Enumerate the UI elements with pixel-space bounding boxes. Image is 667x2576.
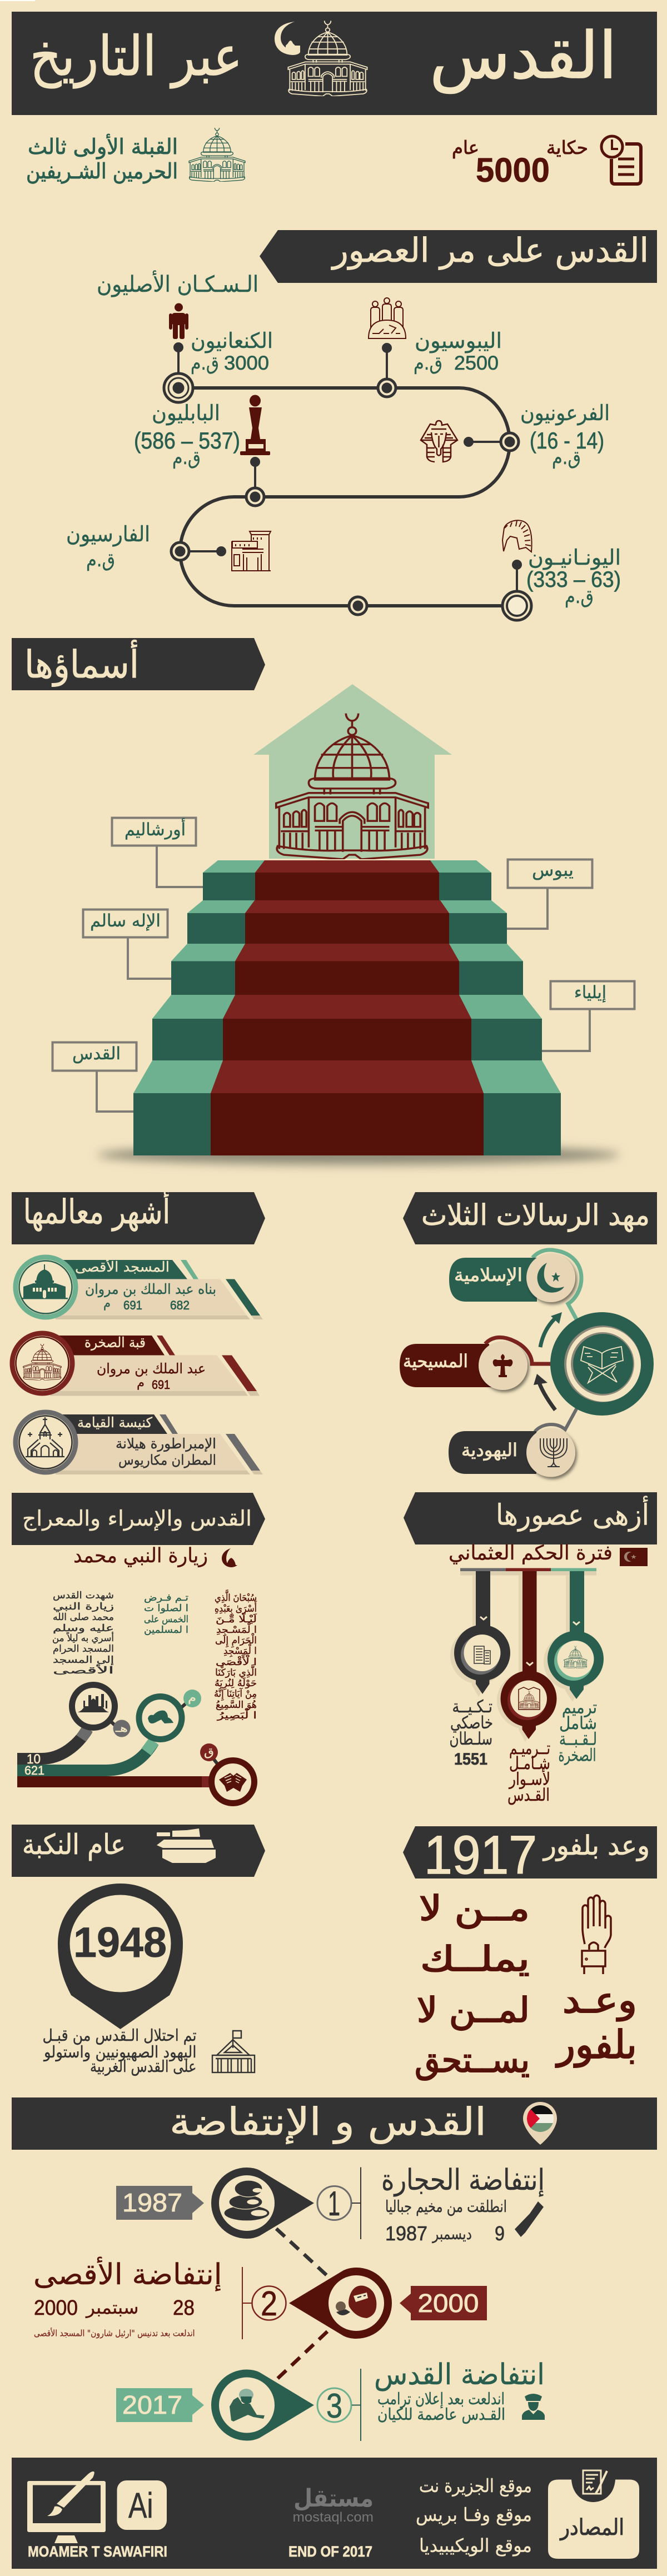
text: Canaanites: 3000 (224, 352, 269, 374)
icon: document with pen (583, 2470, 607, 2494)
text: prophet visit description: الأقصى (53, 1665, 114, 1676)
text: quran verse (214, 1590, 257, 1721)
text: Jebusites: 2500 (454, 352, 499, 374)
text: Babylonians: البابليون (152, 401, 220, 426)
text: hospice: تـكـيــة (452, 1697, 492, 1717)
panel: sources badge (548, 2470, 639, 2559)
text: Greeks: ق.م (565, 586, 594, 608)
panel: intifada timeline (33, 2164, 545, 2441)
heading: balfour 1917 (403, 1825, 657, 1885)
icon: illustrator badge (117, 2480, 167, 2530)
subheading: prophet visit: زيارة النبي محمد (73, 1544, 208, 1567)
icon: people on globe (369, 298, 406, 338)
icon: person (169, 303, 188, 339)
logo: mostaql (292, 2484, 374, 2525)
text: quran verse: هُوَ السَّمِيعُ (216, 1700, 257, 1711)
heading: cradle of three religions: مهد الرسالات الثلاث (421, 1199, 650, 1232)
heading: al-quds and intifada: القدس و الإنتفاضة (170, 2100, 486, 2144)
text: stones detail: انطلقت من مخيم جباليا (385, 2197, 507, 2216)
row: stones intifada (116, 2164, 545, 2245)
icon: crescent and star (537, 1263, 564, 1293)
icon ring (12, 1333, 72, 1393)
text: first qibla: القبلة الأولى ثالث (28, 133, 178, 160)
icon: babylonian statue (240, 395, 270, 455)
text: Canaanites: الكنعانيون (191, 328, 273, 353)
number badge (317, 2186, 351, 2220)
icon: tank (157, 1828, 216, 1863)
arrow: up dark (534, 1374, 555, 1410)
logo: mostaql: mostaql.com (292, 2510, 374, 2525)
text: prophet visit description: أسري به ليلاً من (52, 1632, 114, 1644)
year tag: 1987: 1987 (122, 2188, 182, 2217)
heading: its names: أسماؤها (24, 640, 139, 687)
text: occupation: اليهود الصهيونيين واستولو (43, 2042, 197, 2061)
icon: dome of the rock (288, 21, 367, 96)
text: prophet visit description: محمد صلى الله (53, 1612, 114, 1623)
icon: greek helmet (502, 520, 532, 552)
title ribbon (56, 1414, 167, 1434)
text: sources list: موقع وفـا بريس (416, 2504, 532, 2525)
heading: golden eras: أزهى عصورها (496, 1496, 649, 1532)
text: hospice: 1551 (454, 1750, 487, 1768)
text: sharon note: اندلعت بعد تدنيس "ارئيل شارون" المسجد الأقصى (34, 2328, 195, 2339)
row: aqsa intifada: 2 (261, 2285, 277, 2323)
row: jerusalem intifada: 3 (326, 2387, 342, 2425)
text: occupation: على القدس الغربية (90, 2057, 197, 2076)
text: dome restoration (558, 1697, 597, 1766)
text: quran verse: سُبْحَانَ الَّذِي (215, 1590, 257, 1604)
label: Aelia: إيلياء (574, 983, 606, 1003)
icon: pharaoh (421, 421, 457, 462)
panel: Al-Aqsa card (16, 1257, 263, 1319)
year tag: 2000 (400, 2286, 487, 2320)
timeline nodes (164, 373, 531, 620)
logo: mostaql: مستقل (293, 2484, 374, 2513)
pin: city walls (497, 1571, 557, 1742)
text: Pharaohs: الفرعونيون (520, 401, 610, 426)
pill: christianity (400, 1341, 527, 1390)
text: Jebusites: ق.م (414, 352, 442, 375)
text: aqsa title: إنتفاضة الأقصى (33, 2256, 222, 2291)
text: Jebusites (414, 328, 502, 375)
text: Babylonians: (586 – 537) (134, 427, 240, 454)
heading: balfour 1917: 1917 (424, 1825, 537, 1885)
text: built by: 682 (170, 1298, 190, 1312)
text: aqsa date (34, 2296, 195, 2320)
panel: timeline of peoples (66, 270, 621, 620)
icon: open quran (581, 1347, 623, 1383)
text: five prayers: ا لصلوا ت (144, 1603, 188, 1614)
icon: illustrator badge: Ai (128, 2485, 153, 2525)
text: walls restoration: تــرميـم (509, 1738, 550, 1758)
subheading: ottoman rule: فترة الحكم العثماني (449, 1542, 613, 1564)
text: prophet visit description: إلى المسجد (53, 1655, 114, 1666)
panel: stairs with names (52, 684, 635, 1165)
text: built by: 691 (123, 1298, 142, 1312)
icon: gaza strip (515, 2201, 544, 2237)
label: Yabus (507, 859, 593, 929)
icon: stone thrower (230, 2389, 265, 2421)
dashed connectors (276, 2229, 327, 2380)
number: 1948: 1948 (73, 1919, 167, 1966)
icon: raised hand (582, 1895, 611, 1974)
panel: balfour declaration (415, 1888, 637, 2080)
text: slogan: يملــك (420, 1939, 530, 1979)
icon: prostrating figure (148, 1711, 173, 1723)
pin: dome restoration (544, 1571, 604, 1702)
text: hospice: سلـطان (449, 1729, 492, 1749)
icon: clock document (601, 136, 641, 184)
text: dome restoration: لـقـبــة (559, 1730, 597, 1750)
heading: its names (12, 638, 265, 690)
house backdrop (253, 684, 452, 859)
label: Urshalim (112, 818, 203, 887)
title ribbon: كنيسة القيامة (77, 1414, 152, 1431)
text: built by (85, 1281, 216, 1312)
text: occupation: تم احتلال الـقدس من قبـل (42, 2026, 197, 2045)
text: jerusalem detail: اندلعت بعد إعلان ترامب (377, 2389, 505, 2409)
text: quran verse: ا لْمَسْـجِدِ (216, 1622, 257, 1636)
text: hospice: خاصكي (450, 1713, 493, 1733)
text: dome restoration: ترميم (562, 1697, 597, 1717)
panel: Holy Sepulchre card (16, 1412, 263, 1474)
text: Persians: ق.م (86, 549, 115, 571)
title ribbon (53, 1334, 165, 1355)
icon: parliament (212, 2031, 255, 2072)
map pin (58, 1884, 183, 2029)
text: slogan: لمــن لا (417, 1990, 530, 2030)
color bar (460, 1568, 596, 1575)
icon ring (16, 1257, 76, 1317)
text: prophet visit description: عليه وسلم (53, 1623, 114, 1634)
text: Greeks (526, 545, 621, 608)
title: القدس: القدس (430, 18, 617, 93)
text: occupation (42, 2026, 197, 2076)
heading: al-quds and intifada (12, 2097, 657, 2150)
icon: crescent mosque (222, 1548, 237, 1567)
text: hospice (449, 1697, 493, 1768)
text: prophet visit description: المسجد الحرام (53, 1643, 114, 1655)
year tag: 2000: 2000 (418, 2289, 479, 2318)
icon ring (16, 1412, 76, 1472)
panel: footer (12, 2458, 657, 2569)
text: slogan: مــن لا (419, 1888, 530, 1929)
pill: islam (449, 1253, 575, 1302)
text: prophet visit description (52, 1590, 114, 1676)
text: stones detail: 9 (495, 2222, 505, 2245)
text: Babylonians (134, 401, 240, 469)
arrow: up green (540, 1312, 562, 1347)
icon: crescent with mosque (275, 22, 300, 55)
text: five prayers: الخمس على (144, 1614, 188, 1625)
heading: famous landmarks (12, 1190, 265, 1244)
label: Aelia (542, 981, 635, 1051)
marker: gregorian (139, 1690, 201, 1740)
text: jerusalem detail: القـدس عاصمة للكيان (377, 2405, 505, 2424)
heading: through the ages (260, 230, 657, 283)
connector: christianity line (485, 1337, 565, 1364)
shadow under stairs (97, 1145, 620, 1165)
chart: curved bands (17, 1728, 214, 1787)
pill: christianity: المسيحية (403, 1351, 468, 1372)
row: jerusalem intifada (116, 2358, 545, 2441)
text: Persians: الفارسيون (66, 522, 150, 547)
pill: judaism: اليهودية (461, 1439, 517, 1461)
heading: through the ages: القدس على مر العصور (331, 231, 649, 270)
heading: famous landmarks: أشهر معالمها (23, 1190, 170, 1232)
icon: turkish flag (620, 1548, 648, 1566)
heading: israa and miraj: القدس والإسراء والمعراج (22, 1506, 252, 1531)
text: story: حكاية (546, 137, 588, 158)
text: Abd al-Malik: عبد الملك بن مروان (97, 1361, 206, 1377)
icon: persian palace (232, 531, 271, 571)
label: Yabus: يبوس (532, 860, 574, 880)
text: Persians (66, 522, 150, 571)
label: Urshalim: أورشاليم (125, 818, 186, 840)
icon: dome (564, 1646, 587, 1668)
text: prophet visit description: شهدت القدس (53, 1590, 114, 1601)
text: walls restoration: شـامـل (509, 1753, 550, 1773)
connector: judaism line (535, 1398, 583, 1432)
heading: balfour 1917: وعد بلفور (542, 1830, 650, 1861)
text: Abd al-Malik (97, 1361, 206, 1392)
year tag: 2017 (116, 2388, 204, 2422)
text: sources list: موقع الويكيبيديا (419, 2534, 532, 2557)
number badge (252, 2286, 286, 2320)
panel: intro stats (26, 128, 641, 189)
year tag: 1987 (116, 2186, 204, 2220)
text: sources list (416, 2475, 532, 2557)
text: quran verse: الَّذِي بَارَكْنَا (215, 1664, 257, 1678)
text: Helena and Macarius (116, 1436, 216, 1468)
text: aqsa date: سبتمبر (85, 2297, 139, 2318)
label: Al-Quds (52, 1043, 137, 1112)
text: balfour promise: بلفور (555, 2022, 637, 2067)
text: end of 2017: END OF 2017 (288, 2543, 372, 2560)
panel: nakba 1948 (42, 1884, 255, 2076)
center circle with quran (550, 1312, 654, 1416)
icon: church (26, 1417, 64, 1457)
text: original inhabitants: الـسـكـان الأصليون (97, 270, 258, 297)
heading: nakba year (12, 1825, 265, 1877)
text: designer name: MOAMER T SAWAFIRI (28, 2543, 167, 2560)
marker: quran (200, 1743, 255, 1803)
text: dome restoration: الصخرة (558, 1746, 596, 1766)
heading: golden eras (404, 1492, 657, 1544)
text: Pharaohs: (16 - 14) (530, 427, 604, 454)
panel: ottoman era (449, 1542, 648, 1805)
text: balfour promise (555, 1980, 637, 2067)
text: Helena and Macarius: المطران مكاريوس (118, 1452, 216, 1468)
panel: sources badge: المصادر (559, 2515, 624, 2540)
icon: masked youth (336, 2285, 376, 2318)
year tag: 2017: 2017 (122, 2390, 182, 2419)
icon: dome (23, 1344, 61, 1381)
text: quran verse: مِنْ آيَاتِنَا إِنَّهُ (214, 1687, 257, 1701)
text: jerusalem detail (377, 2389, 505, 2424)
heading: cradle of three religions (403, 1192, 657, 1244)
chart: curved bands: 621 (24, 1763, 44, 1777)
label: Al-Quds: القدس (72, 1044, 121, 1064)
text: aqsa date: 28 (173, 2296, 195, 2320)
text: walls restoration: القـدس (507, 1785, 550, 1805)
text: Abd al-Malik: م (137, 1376, 145, 1390)
text: five prayers (144, 1592, 188, 1636)
text: Canaanites: ق.م (191, 352, 219, 375)
text: first qibla: الحرمين الشـريفين (26, 159, 178, 184)
text: first qibla (26, 133, 178, 184)
text: built by: م (103, 1297, 111, 1311)
text: quran verse: حَوْلَهُ لِنُرِيَهُ (215, 1677, 257, 1690)
icon: menorah (540, 1438, 567, 1467)
stairs (133, 860, 561, 1155)
text: stones detail: 1987 (385, 2222, 427, 2245)
row: stones intifada: 1 (328, 2185, 340, 2223)
timeline path (178, 388, 517, 606)
label: god Salem (83, 909, 171, 979)
text: aqsa date: 2000 (34, 2296, 78, 2320)
text: dome restoration: شامل (559, 1713, 597, 1733)
label: god Salem: الإله سالم (90, 911, 161, 931)
text: Pharaohs: ق.م (552, 447, 581, 469)
number: 5000: 5000 (476, 151, 550, 189)
icon: green dome (189, 128, 245, 182)
text: quran verse: أَسْرَىٰ بِعَبْدِهِ (215, 1601, 257, 1615)
icon: walls and dome (519, 1687, 540, 1710)
pill: judaism (449, 1428, 575, 1477)
marker: hijri: هـ (115, 1723, 128, 1735)
text: year: عام (452, 137, 479, 158)
text: Canaanites (191, 328, 273, 375)
text: jerusalem title: انتفاضة القدس (374, 2358, 545, 2391)
text: prophet visit description: زيارة النبي (53, 1601, 114, 1612)
text: stones detail: ديسمبر (431, 2225, 472, 2243)
pin: hospice (450, 1571, 510, 1697)
icon: monitor and brush (27, 2472, 106, 2543)
text: balfour promise: وعـد (563, 1980, 637, 2021)
marker: quran: ق (204, 1745, 214, 1758)
text: Greeks: (333 – 63) (526, 567, 621, 592)
text: five prayers: ا لمسلمين (144, 1625, 188, 1636)
red carpet (211, 860, 484, 1155)
pin stems (175, 343, 521, 592)
icon: dome of the rock (276, 714, 428, 859)
text: Babylonians: ق.م (172, 447, 201, 469)
icon: palestine flag pin (523, 2102, 557, 2145)
text: Jebusites: اليبوسيون (415, 328, 502, 353)
text: quran verse: الْحَرَامِ إِلَى (215, 1633, 257, 1648)
icon: aqsa silhouette (21, 1264, 68, 1299)
marker: hijri (72, 1685, 130, 1737)
panel: three religions (400, 1250, 654, 1477)
text: stones detail (385, 2197, 507, 2245)
text: five prayers: تـم فـرض (144, 1592, 188, 1603)
text: stones title: إنتفاضة الحجارة (381, 2164, 545, 2197)
icon: cross (493, 1354, 512, 1377)
text: Abd al-Malik: 691 (152, 1378, 170, 1392)
text: Greeks: اليونـانيـون (528, 545, 621, 570)
icon: mosque silhouette (78, 1694, 109, 1712)
text: quran verse: ا لْبَصِيرُ (217, 1708, 257, 1721)
title ribbon: المسجد الأقصى (75, 1258, 170, 1275)
panel: title banner (12, 12, 657, 115)
heading: nakba year: عام النكبة (22, 1828, 126, 1861)
pill: islam: الإسلامية (454, 1264, 522, 1285)
text: walls restoration (507, 1738, 550, 1805)
row: aqsa intifada (33, 2256, 487, 2339)
connector: islam line (532, 1250, 582, 1329)
text: slogan: يســتحق (415, 2040, 530, 2080)
title: عبر التاريخ: عبر التاريخ (30, 25, 242, 88)
title ribbon: قبة الصخرة (84, 1334, 146, 1351)
text: quran verse: ا لْمَسْجِدِ (223, 1643, 257, 1657)
chart: curved bands: 10 (27, 1752, 41, 1767)
text: slogan (415, 1888, 530, 2080)
text: sources list: موقع الجزيرة نت (419, 2475, 532, 2497)
icon: open book (219, 1773, 247, 1792)
number badge (317, 2388, 351, 2422)
panel: the prophet's visit (17, 1544, 257, 1803)
text: Pharaohs (520, 401, 610, 469)
text: built by: بناه عبد الملك بن مروان (85, 1281, 216, 1298)
marker: gregorian: م (188, 1691, 196, 1704)
icon: building (474, 1646, 490, 1664)
text: Helena and Macarius: الإمبراطورة هيلانة (116, 1436, 216, 1452)
text: quran verse: ا لْأَقْصَى (216, 1654, 257, 1668)
panel: Dome of the Rock card (12, 1333, 260, 1396)
icon: stones (224, 2180, 270, 2221)
text: walls restoration: لأسـوار (508, 1768, 550, 1790)
pin center (70, 1895, 171, 1992)
title ribbon (56, 1258, 187, 1279)
icon: officer (522, 2394, 545, 2420)
text: quran verse: لَيْـلًا مِّـنَ (216, 1612, 257, 1625)
heading: israa and miraj (12, 1493, 265, 1545)
